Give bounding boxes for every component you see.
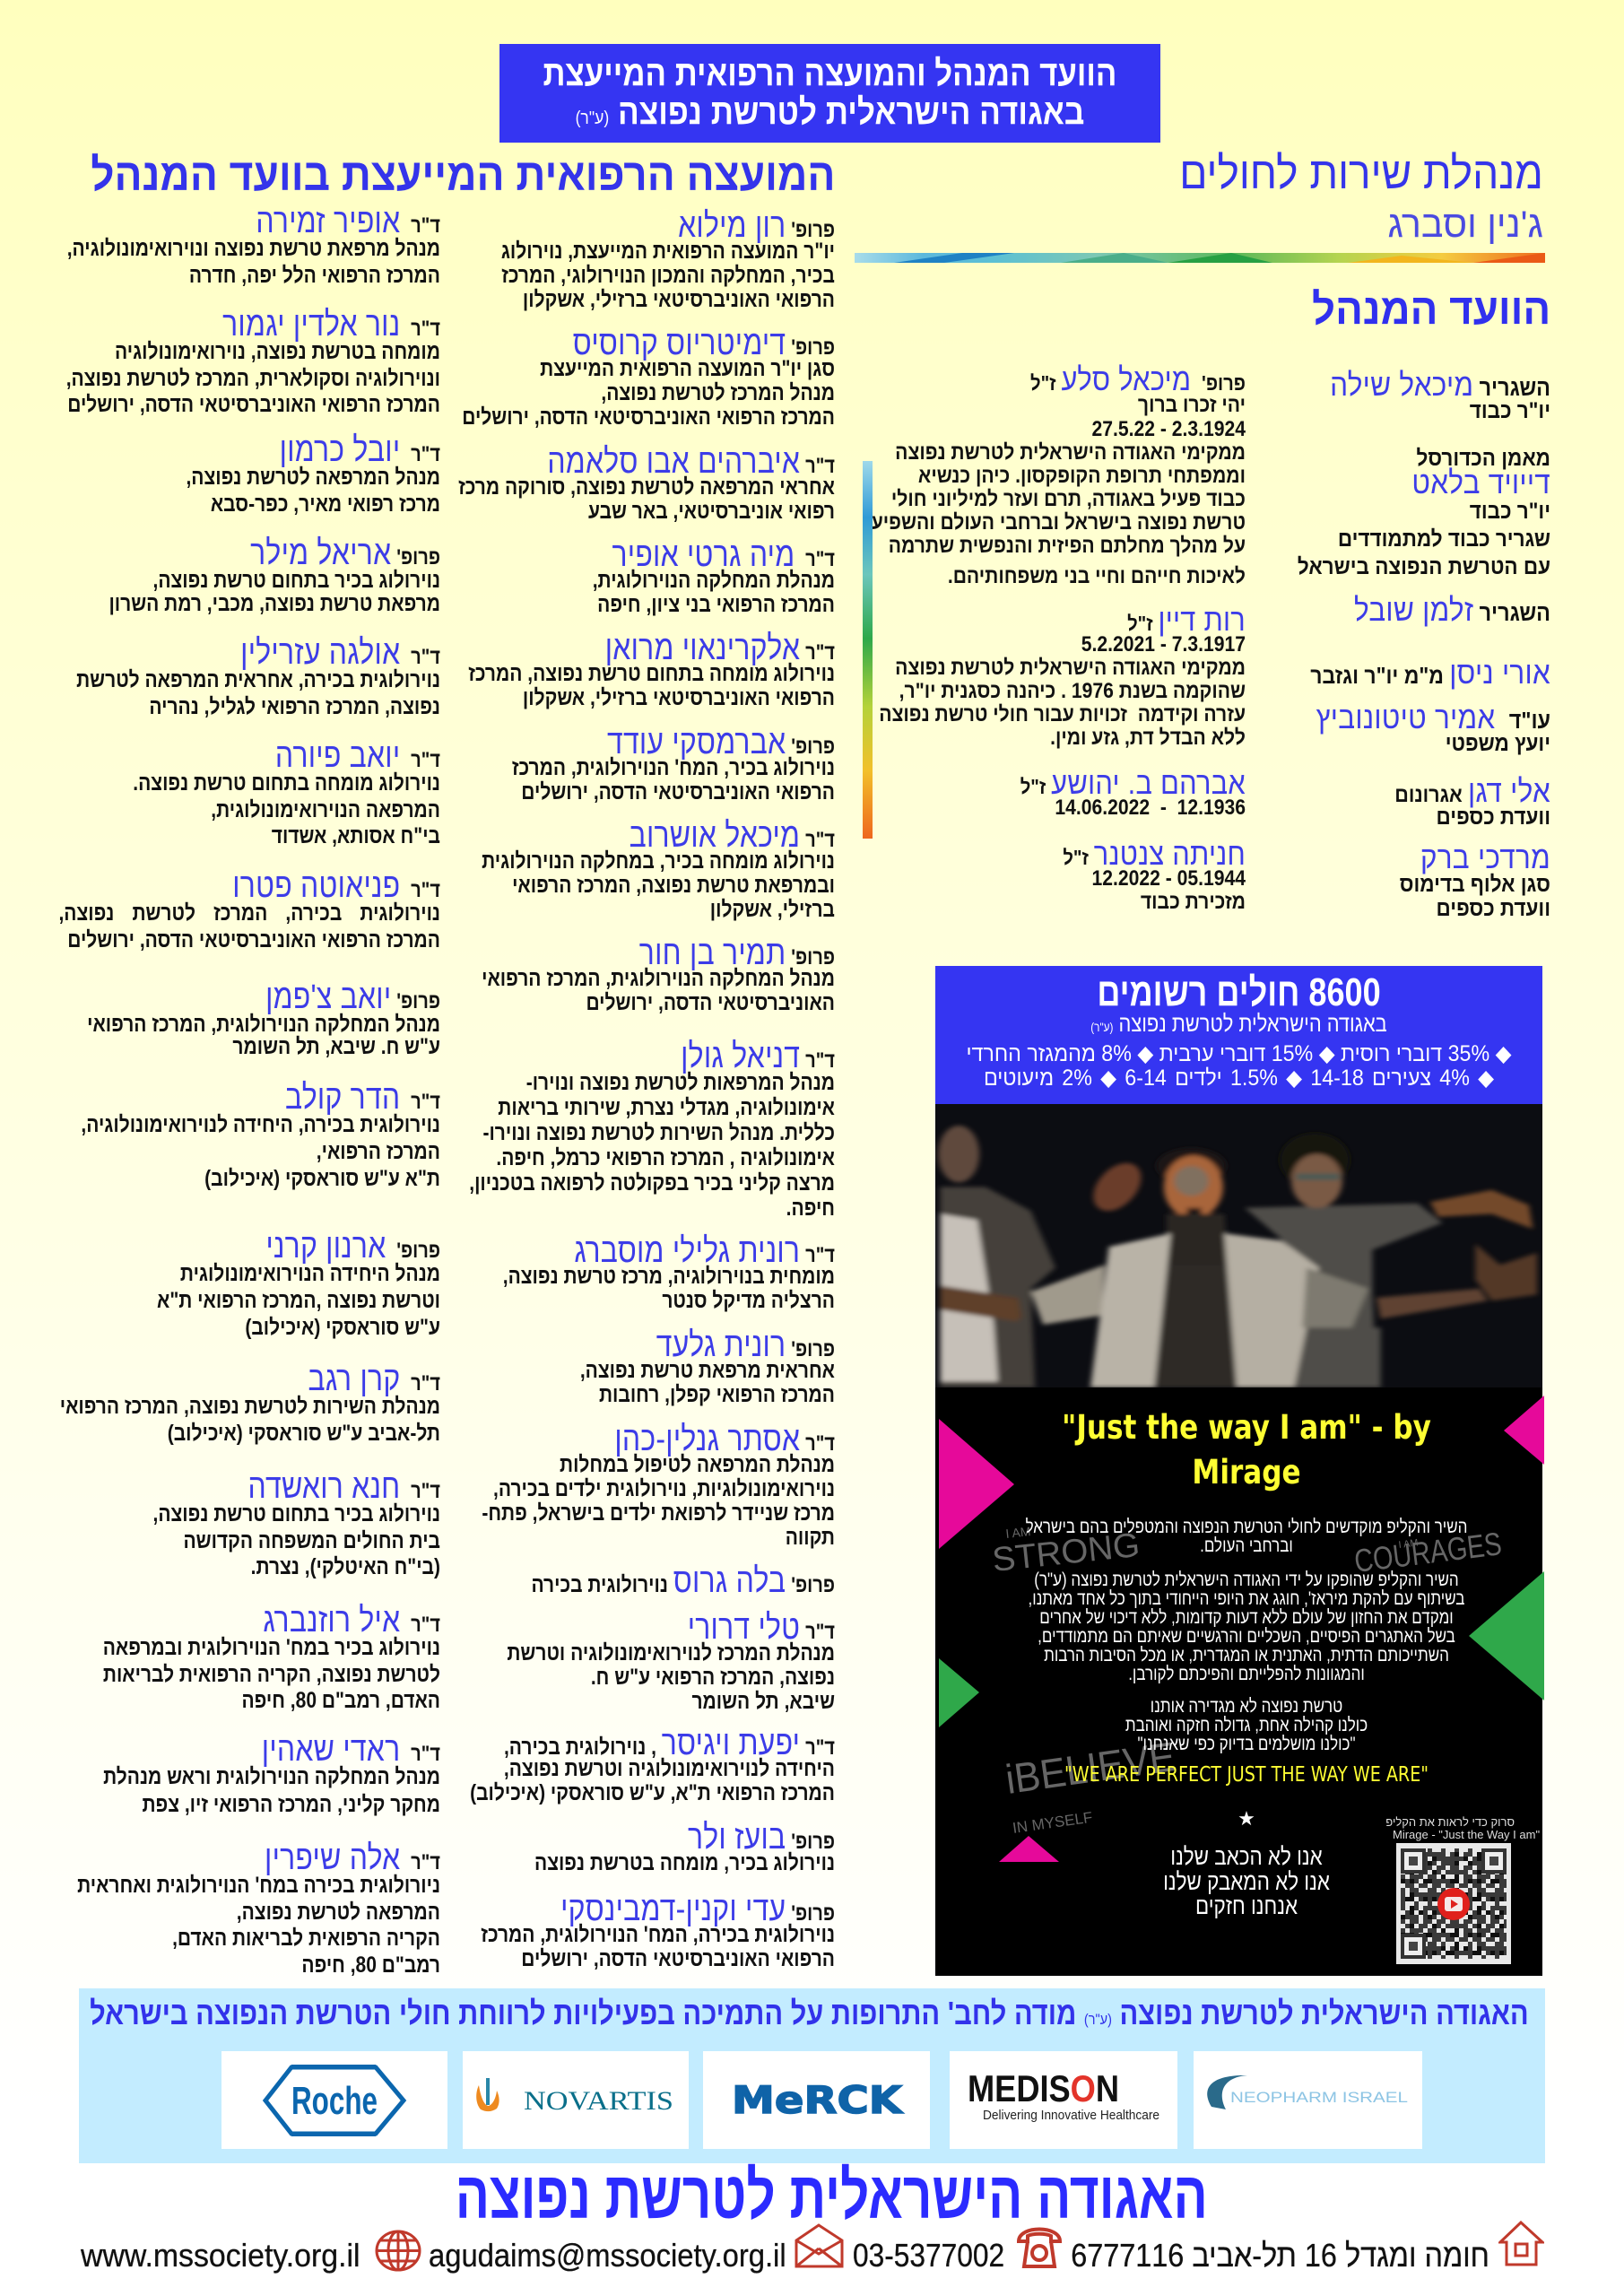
- council: Michael Osherov: ברזילי, אשקלון: [710, 897, 835, 922]
- council: Yifat Vigiser: היחידה לנוירואימונולוגיה וטרשת נפוצה,: [504, 1756, 835, 1781]
- council: Tali Drori: מנהלת המרכז לנוירואימונולוגיה וטרשת: [507, 1640, 835, 1665]
- council: Keren Regev: [64, 1365, 440, 1448]
- closing statement: אנו לא הכאב שלנו: [1170, 1843, 1323, 1870]
- memorial: Ruth Dayan: שהוקמה בשנת 1976 . כיהנה כסגנית יו"ר,: [899, 679, 1246, 703]
- logo: Roche: [221, 2051, 447, 2149]
- council: Tali Drori: ד"ר טלי דרורי: [688, 1609, 835, 1647]
- council: Eyal Rosenberg: [64, 1606, 440, 1715]
- council: Ella Shifrin: ניורולוגית בכירה במח' הנוירולוגית ואחראית: [77, 1873, 440, 1898]
- board: Mordechai Barak: וועדת כספים: [1437, 896, 1550, 921]
- council: Adi Vaknin-Dembinsky: [481, 1891, 835, 1971]
- council: Adi Vaknin-Dembinsky: הרפואי האוניברסיטאי הדסה, ירושלים: [521, 1946, 835, 1971]
- council: Adi Vaknin-Dembinsky: נוירולוגית בכירה, המח' הנוירולוגית, המרכז: [481, 1922, 835, 1947]
- board: David Blatt: מאמן הכדורסל: [1417, 446, 1550, 471]
- council: Ariel Miller: פרופ' אריאל מילר: [250, 535, 440, 572]
- QR caption: [1393, 1816, 1515, 1841]
- council: Yoav Piura: ד"ר יואב פיורה: [275, 737, 440, 775]
- closing statement: אנו לא המאבק שלנו: [1163, 1867, 1330, 1894]
- council: Hana Rawashdeh: (בי"ח האיטלקי), נצרת.: [251, 1554, 440, 1579]
- memorial: A.B. Yehoshua: אברהם ב. יהושע ז"ל: [1020, 766, 1246, 801]
- council: Esther Ganelin-Cohen: ד"ר אסתר גנלין-כהן: [614, 1421, 835, 1458]
- council: Eyal Rosenberg: ד"ר איל רוזנברג: [263, 1602, 440, 1639]
- photo: band Mirage performing: [935, 1104, 1542, 1388]
- panel: registered patients stats: [935, 966, 1542, 1104]
- song text paragraph 3: "כולנו מושלמים בדיוק כפי שאנחנו": [1137, 1734, 1356, 1754]
- council: Esther Ganelin-Cohen: תקווה: [786, 1525, 835, 1550]
- sponsors heading: האגודה הישראלית לטרשת נפוצה (ע"ר) מודה לחב' התרופות על התמיכה בפעילויות לרווחת חולי הטרשת הנפוצה בישראל: [90, 1995, 1529, 2031]
- council: Radi Shahien: מנהל המחלקה הנוירולוגית וראש מנהלת: [103, 1764, 440, 1789]
- council: Abramsky Oded: [512, 724, 835, 804]
- council: Ibrahim Abu Salameh: ד"ר איברהים אבו סלאמה: [547, 443, 835, 481]
- council: Maya Gerty Ofir: [593, 536, 835, 617]
- council: Maya Gerty Ofir: מנהלת המחלקה הנוירולוגית,: [593, 568, 835, 593]
- song title: "Just the way I am" - by: [1062, 1408, 1431, 1447]
- memorial: Michael Sela: כבוד פעיל באגודה, תרם ועזר למיליוני חולי: [891, 487, 1246, 511]
- board: David Blatt: שגריר כבוד למתמודדים: [1338, 526, 1550, 552]
- board: Mordechai Barak: [1400, 840, 1550, 921]
- song text paragraph 3: טרשת נפוצה לא מגדירה אותנו: [1151, 1696, 1342, 1717]
- memorial: Michael Sela: [872, 362, 1246, 588]
- contact: address: חומה ומגדל 16 תל-אביב 6777116: [1071, 2237, 1489, 2274]
- council: Keren Regev: מנהלת השירות לטרשת נפוצה, המרכז הרפואי: [60, 1394, 440, 1419]
- council: Hadar Kolb: נוירולוגית בכירה, היחידה לנוירואימונולוגיה,: [81, 1112, 440, 1137]
- decorative triangles: iBELIEVE: [1003, 1733, 1178, 1803]
- council: Ofir Zmira: המרכז הרפואי הלל יפה, חדרה: [189, 262, 440, 287]
- board: David Blatt: דייויד בלאט: [1411, 465, 1550, 500]
- council: Ella Shifrin: רמב"ם 80, חיפה: [301, 1952, 440, 1977]
- memorial: Hanita Tzenter: חניתה צנטנר ז"ל: [1063, 837, 1246, 872]
- stat headline: 8600 חולים רשומים: [1097, 970, 1381, 1014]
- council: Ron Milo: [501, 207, 835, 312]
- star: ★: [1238, 1807, 1255, 1830]
- yellow slogan: "WE ARE PERFECT JUST THE WAY WE ARE": [1064, 1763, 1429, 1787]
- heading: medical advisory council: המועצה הרפואית המייעצת בוועד המנהל: [91, 150, 835, 200]
- council: Ronit Galili Mosberg: ד"ר רונית גלילי מוסברג: [574, 1232, 835, 1270]
- logo: Medison: [950, 2051, 1177, 2149]
- council: Ronit Gilad: המרכז הרפואי קפלן, רחובות: [599, 1382, 835, 1407]
- song text paragraph 3: [935, 1697, 1558, 1753]
- song text paragraph 2: ומקדם את החזון של עולם ללא דעות קדומות, ללא דיכוי של אחרים: [1039, 1607, 1454, 1628]
- council: Daniel Golan: ד"ר דניאל גולן: [681, 1038, 835, 1075]
- council: Esther Ganelin-Cohen: מרכז שניידר לרפואת ילדים בישראל, פתח-: [482, 1500, 835, 1526]
- board: Michael Shilo: [1330, 368, 1550, 423]
- council: Ella Shifrin: המרפאה לטרשת נפוצה,: [237, 1900, 440, 1925]
- council: Boaz Weller: [534, 1819, 835, 1875]
- council: Keren Regev: ד"ר קרן רגב: [308, 1361, 440, 1398]
- song text paragraph 1: וברחבי העולם.: [1200, 1535, 1293, 1556]
- council: Arnon Karni: [64, 1232, 440, 1342]
- council: Tali Drori: נפוצה, המרכז הרפואי ע"ש ח.: [591, 1665, 835, 1690]
- rainbow bar horizontal: [855, 253, 1545, 263]
- board: Amir Titunovitch: [1316, 700, 1550, 756]
- title line 2: באגודה הישראלית לטרשת נפוצה (ע"ר): [576, 92, 1084, 132]
- council: Yuval Karmon: ד"ר יובל כרמון: [280, 431, 440, 469]
- heading: patient services manager: מנהלת שירות לחולים: [1179, 148, 1543, 198]
- song title: Mirage: [1192, 1453, 1301, 1492]
- contact: phone: 03-5377002: [853, 2237, 1004, 2274]
- logo: Roche: Roche: [291, 2079, 378, 2123]
- logo: Neopharm Israel: NEOPHARM ISRAEL: [1230, 2089, 1408, 2106]
- council: Ella Shifrin: ד"ר אלה שיפרין: [265, 1839, 440, 1877]
- council: Radi Shahien: [64, 1735, 440, 1819]
- council: Yuval Karmon: [186, 431, 440, 517]
- council: Eyal Rosenberg: נוירולוג בכיר במח' הנוירולוגית ובמרפאה: [103, 1635, 440, 1660]
- council: Olga Azarilin: [64, 639, 440, 720]
- council: Yuval Karmon: מרכז רפואי מאיר, כפר-סבא: [211, 491, 440, 517]
- board: Zalman Shoval: השגריר זלמן שובל: [1354, 593, 1550, 628]
- council: Daniel Golan: אימונולוגיה , המרכז הרפואי כרמל, חיפה.: [496, 1145, 835, 1170]
- council: Yifat Vigiser: [470, 1725, 835, 1805]
- council: Yoav Piura: נוירולוג מומחה בתחום טרשת נפוצה.: [133, 770, 440, 796]
- council: Tali Drori: [507, 1609, 835, 1714]
- logo: Merck: [703, 2051, 930, 2149]
- council: Yoav Chapman: ע"ש ח. שיבא, תל השומר: [232, 1034, 440, 1059]
- panel: sponsors thanks: [79, 1988, 1545, 2163]
- council: Abramsky Oded: הרפואי האוניברסיטאי הדסה, ירושלים: [521, 779, 835, 804]
- council column right: [458, 207, 835, 1971]
- memorial: Michael Sela: פרופ' מיכאל סלע ז"ל: [1030, 362, 1246, 397]
- council: Ronit Gilad: אחראית מרפאת טרשת נפוצה,: [580, 1358, 835, 1383]
- council: Tamir Ben Hur: [482, 935, 835, 1015]
- council: Ibrahim Abu Salameh: אחראי המרפאה לטרשת נפוצה, סורוקה מרכז: [458, 474, 835, 500]
- council: Dimitrios Karussis: סגן יו"ר המועצה הרפואית המייעצת: [540, 356, 835, 381]
- heading: board of directors: הוועד המנהל: [1312, 286, 1550, 334]
- memorial: Hanita Tzenter: 05.1944 - 12.2022: [1092, 866, 1246, 891]
- council: Arnon Karni: מנהל היחידה הנוירואימונולוגית: [180, 1261, 440, 1286]
- council: Nour Eldin Yagmour: המרכז הרפואי האוניברסיטאי הדסה, ירושלים: [67, 392, 440, 417]
- council: Ella Shifrin: הקריה הרפואית לבריאות האדם,: [172, 1926, 440, 1951]
- council: Hadar Kolb: המרכז הרפואי,: [317, 1139, 440, 1164]
- song text paragraph 2: [935, 1570, 1558, 1683]
- title banner: [499, 44, 1160, 143]
- board: Mordechai Barak: סגן אלוף בדימוס: [1400, 872, 1550, 897]
- council: Olga Azarilin: ד"ר אולגה עזרילין: [240, 634, 440, 672]
- QR code: [1396, 1843, 1511, 1964]
- footer organisation name: האגודה הישראלית לטרשת נפוצה: [456, 2158, 1208, 2232]
- memorial: Ruth Dayan: [879, 603, 1246, 750]
- stats line 2: ◆ 4% צעירים 14-18 ◆ 1.5% ילדים 6-14 ◆ 2% מיעוטים: [984, 1065, 1494, 1091]
- council: Maya Gerty Ofir: המרכז הרפואי בני ציון, חיפה: [597, 592, 835, 617]
- council: Daniel Golan: מנהל המרפאות לטרשת נפוצה ונוירו-: [526, 1070, 835, 1095]
- board: David Blatt: [1298, 446, 1550, 579]
- council: Ronit Galili Mosberg: מומחית בנוירולוגיה, מרכז טרשת נפוצה,: [503, 1264, 835, 1289]
- council: Dimitrios Karussis: פרופ' דימיטריוס קרוסיס: [573, 325, 835, 362]
- council: Ron Milo: בכיר, המחלקה והמכון הנוירולוגי, המרכז: [501, 263, 835, 288]
- council: Daniel Golan: [469, 1038, 835, 1221]
- council: Ofir Zmira: [67, 203, 440, 287]
- council: Tamir Ben Hur: פרופ' תמיר בן חור: [639, 935, 835, 972]
- board: Michael Shilo: השגריר מיכאל שילה: [1330, 368, 1550, 403]
- council: Elkrinawi Marwan: ד"ר אלקרינאוי מרואן: [605, 630, 835, 667]
- memorial: A.B. Yehoshua: [1020, 766, 1246, 820]
- council: Daniel Golan: מרצה קליני בכיר בפקולטה לרפואה בטכניון,: [469, 1170, 835, 1196]
- council: Ronit Galili Mosberg: [503, 1232, 835, 1313]
- council: Nour Eldin Yagmour: מומחה בטרשת נפוצה, נוירואימונולוגיה: [115, 339, 440, 364]
- council: Yifat Vigiser: ד"ר יפעת ויגיסר , נוירולוגית בכירה,: [504, 1725, 835, 1762]
- council: Michael Osherov: ובמרפאת טרשת נפוצה, המרכז הרפואי: [512, 873, 835, 898]
- memorial: Michael Sela: ממקימי האגודה הישראלית לטרשת נפוצה: [895, 440, 1246, 465]
- memorial: Michael Sela: יהי זכרו ברוך: [1138, 393, 1246, 417]
- council: Panayiota Petrou: נוירולוגית בכירה, המרכז לטרשת נפוצה,: [58, 900, 440, 926]
- logo: Medison: Delivering Innovative Healthcare: [983, 2108, 1159, 2123]
- memorial: Michael Sela: 2.3.1924 - 27.5.22: [1092, 417, 1246, 441]
- memorial: Ruth Dayan: עזרה וקידמה זכויות עבור חולי טרשת נפוצה: [879, 702, 1246, 726]
- logo: Neopharm Israel: [1194, 2051, 1422, 2149]
- rainbow bar vertical: [863, 461, 873, 839]
- council: Yoav Piura: המרפאה הנוירואימונולוגית,: [211, 796, 440, 822]
- council: Maya Gerty Ofir: ד"ר מיה גרטי אופיר: [612, 536, 835, 574]
- council: Panayiota Petrou: [64, 872, 440, 953]
- stat subtitle: באגודה הישראלית לטרשת נפוצה (ע"ר): [1090, 1010, 1387, 1037]
- council: Boaz Weller: פרופ' בועז ולר: [688, 1819, 835, 1857]
- icon: house: [1498, 2221, 1544, 2266]
- stats line 1: ◆ 35% דוברי רוסית ◆ 15% דוברי ערבית ◆ 8% מהמגזר החרדי: [967, 1041, 1511, 1066]
- icon: telephone: [1015, 2227, 1064, 2268]
- board: Eli Dagan: וועדת כספים: [1437, 804, 1550, 830]
- council: Ronit Gilad: [580, 1326, 835, 1407]
- contact: email: agudaims@mssociety.org.il: [429, 2237, 786, 2274]
- memorial: Michael Sela: לאיכות חייהם וחיי בני משפחותיהם.: [948, 564, 1246, 588]
- decorative triangles: STRONG: [991, 1526, 1142, 1579]
- council: Michael Osherov: [482, 817, 835, 922]
- council: Daniel Golan: חיפה.: [786, 1196, 835, 1221]
- council: Olga Azarilin: נפוצה, המרכז הרפואי לגליל, נהריה: [149, 694, 440, 719]
- memorial: Ruth Dayan: ממקימי האגודה הישראלית לטרשת נפוצה: [895, 656, 1246, 680]
- memorial: Michael Sela: על מהלך מחלתם הפיזית והנפשית שתרמה: [889, 534, 1246, 558]
- board: David Blatt: עם הטרשת הנפוצה בישראל: [1298, 554, 1550, 579]
- council: Panayiota Petrou: ד"ר פניאוטה פטרו: [232, 867, 440, 905]
- council: Ronit Galili Mosberg: הרצליה מדיקל סנטר: [662, 1288, 835, 1313]
- council: Esther Ganelin-Cohen: [482, 1421, 835, 1550]
- memorial: Ruth Dayan: רות דיין ז"ל: [1127, 603, 1246, 638]
- council: Hana Rawashdeh: [64, 1473, 440, 1580]
- council: Arnon Karni: ע"ש סוראסקי (איכילוב): [245, 1315, 440, 1340]
- council: Tali Drori: שיבא, תל השומר: [691, 1689, 835, 1714]
- council: Abramsky Oded: נוירולוג בכיר, המח' הנוירולוגית, המרכז: [512, 755, 835, 780]
- council: Olga Azarilin: נוירולוגית בכירה, אחראית המרפאה לטרשת: [76, 667, 440, 692]
- council: Esther Ganelin-Cohen: מנהלת המרפאה לטיפול במחלות: [560, 1452, 835, 1477]
- decorative triangles: I AM: [1398, 1537, 1419, 1551]
- council: Esther Ganelin-Cohen: נוירואימונולוגיות, נוירולוגית ילדים בכירה,: [493, 1476, 835, 1501]
- song text paragraph 2: בשל האתגרים הפיסיים, השכליים והרגשיים שאיתם הם מתמודדים,: [1038, 1626, 1455, 1647]
- council: Eyal Rosenberg: לטרשת נפוצה, הקריה הרפואית לבריאות: [103, 1661, 440, 1686]
- board: Eli Dagan: אלי דגן אגרונום: [1394, 774, 1550, 809]
- council: Hana Rawashdeh: ד"ר חנא רואשדה: [248, 1468, 440, 1506]
- council: Boaz Weller: נוירולוג בכיר, מומחה בטרשת נפוצה: [534, 1850, 835, 1875]
- contact: website: www.mssociety.org.il: [81, 2237, 360, 2274]
- council: Elkrinawi Marwan: [468, 630, 835, 710]
- council column left: [58, 203, 440, 1977]
- council: Hadar Kolb: ת"א ע"ש סוראסקי (איכילוב): [204, 1166, 440, 1191]
- council: Dimitrios Karussis: המרכז הרפואי האוניברסיטאי הדסה, ירושלים: [462, 404, 835, 430]
- song text paragraph 3: כולנו קהילה אחת, גדולה חזקה ואוהבת: [1125, 1715, 1368, 1735]
- memorial: Michael Sela: טרשת נפוצה בישראל וברחבי העולם והשפיע: [872, 510, 1246, 535]
- icon: globe: [375, 2230, 421, 2272]
- closing statement: [988, 1845, 1505, 1919]
- council: Dimitrios Karussis: מנהל המרכז לטרשת נפוצה,: [601, 380, 835, 405]
- council: Nour Eldin Yagmour: ד"ר נור אלדין יגמור: [222, 306, 440, 344]
- council: Yoav Chapman: מנהל המחלקה הנוירולוגית, המרכז הרפואי: [87, 1012, 440, 1037]
- council: Ronit Gilad: פרופ' רונית גלעד: [656, 1326, 835, 1364]
- council: Ibrahim Abu Salameh: [458, 443, 835, 524]
- memorial: Michael Sela: וממפתחי תרופת הקופקסון. כיהן כנשיא: [918, 464, 1246, 488]
- council: Ariel Miller: נוירולוג בכיר בתחום טרשת נפוצה,: [152, 568, 440, 593]
- board: Uri Nisan: אורי ניסן מ"מ יו"ר וגזבר: [1310, 656, 1550, 691]
- council: Hadar Kolb: ד"ר הדר קולב: [285, 1079, 440, 1117]
- council: Abramsky Oded: פרופ' אברמסקי עודד: [607, 724, 835, 761]
- council: Daniel Golan: אימונולוגיה, מגדלי נצרת, שירותי בריאות: [498, 1095, 835, 1120]
- council: Nour Eldin Yagmour: ונוירולוגיה וסקולארית, המרכז לטרשת נפוצה,: [66, 366, 440, 391]
- QR caption: סרוק כדי לראות את הקליפ: [1385, 1815, 1515, 1829]
- name: patient services manager: ג'נין וסברג: [1388, 203, 1543, 245]
- song text paragraph 2: השתייכותם הדתית, האתנית או המגדרית, או מכל הסיבות הרבות: [1044, 1645, 1449, 1665]
- council: Nour Eldin Yagmour: [66, 306, 440, 417]
- title line 1: הוועד המנהל והמועצה הרפואית המייעצת: [543, 54, 1116, 93]
- council: Panayiota Petrou: המרכז הרפואי האוניברסיטאי הדסה, ירושלים: [67, 927, 440, 952]
- council: Yuval Karmon: מנהל המרפאה לטרשת נפוצה,: [186, 465, 440, 490]
- logo: Novartis: [463, 2051, 689, 2149]
- council: Ron Milo: פרופ' רון מילוא: [678, 207, 835, 245]
- decorative triangles: IN MYSELF: [1012, 1809, 1093, 1837]
- memorial: Hanita Tzenter: מזכירת כבוד: [1141, 890, 1246, 914]
- council: Ron Milo: יו"ר המועצה הרפואית המייעצת, נוירולוג: [501, 239, 835, 264]
- council: Dimitrios Karussis: [462, 325, 835, 430]
- board: Michael Shilo: יו"ר כבוד: [1470, 398, 1550, 423]
- council: Ron Milo: הרפואי האוניברסיטאי ברזילי, אשקלון: [523, 287, 835, 312]
- memorial: Ruth Dayan: 7.3.1917 - 5.2.2021: [1081, 632, 1246, 657]
- panel: song Just the way I am: [935, 1387, 1542, 1976]
- council: Keren Regev: תל-אביב ע"ש סוראסקי (איכילוב): [168, 1421, 440, 1446]
- council: Yoav Chapman: [64, 983, 440, 1060]
- closing statement: אנחנו חזקים: [1195, 1892, 1298, 1919]
- council: Ella Shifrin: [64, 1844, 440, 1979]
- council: Ofir Zmira: ד"ר אופיר זמירה: [256, 203, 440, 240]
- logo: Merck: MeRCK: [732, 2078, 904, 2122]
- council: Eyal Rosenberg: האדם, רמב"ם 80, חיפה: [241, 1688, 440, 1713]
- council: Hana Rawashdeh: נוירולוג בכיר בתחום טרשת נפוצה,: [152, 1501, 440, 1526]
- board: Amir Titunovitch: יועץ משפטי: [1446, 731, 1550, 756]
- board: Amir Titunovitch: עו"ד אמיר טיטונוביץ: [1316, 700, 1550, 735]
- council: Yoav Piura: בי"ח אסותא, אשדוד: [272, 823, 440, 848]
- icon: envelope: [795, 2223, 844, 2268]
- council: Elkrinawi Marwan: הרפואי האוניברסיטאי ברזילי, אשקלון: [523, 685, 835, 710]
- council: Ofir Zmira: מנהל מרפאת טרשת נפוצה ונוירואימונולוגיה,: [67, 236, 440, 261]
- council: Tamir Ben Hur: האוניברסיטאי הדסה, ירושלים: [586, 990, 835, 1015]
- council: Arnon Karni: פרופ' ארנון קרני: [265, 1228, 440, 1265]
- song text paragraph 1: השיר והקליפ מוקדשים לחולי הטרשת הנפוצה והמטפלים בהם בישראל: [1026, 1517, 1467, 1537]
- council: Yifat Vigiser: המרכז הרפואי ת"א, ע"ש סוראסקי (איכילוב): [470, 1780, 835, 1805]
- song text paragraph 2: בשיתוף עם להקת מיראז', חוגג את היופי הייחודי בתוך כל אחד מאתנו,: [1029, 1588, 1464, 1609]
- council: Yoav Piura: [64, 742, 440, 850]
- QR caption: Mirage - "Just the Way I am": [1393, 1828, 1540, 1841]
- memorial: Ruth Dayan: ללא הבדל דת, גזע ומין.: [1050, 726, 1246, 750]
- council: Ibrahim Abu Salameh: רפואי אוניברסיטאי, באר שבע: [588, 499, 835, 524]
- council: Arnon Karni: וטרשת נפוצה ,המרכז הרפואי ת"א: [157, 1288, 440, 1313]
- council: Ariel Miller: מרפאת טרשת נפוצה, מכבי, רמת השרון: [109, 591, 440, 616]
- council: Hana Rawashdeh: בית החולים המשפחה הקדושה: [183, 1528, 440, 1553]
- council: Adi Vaknin-Dembinsky: פרופ' עדי וקנין-דמבינסקי: [560, 1891, 835, 1928]
- council: Bella Gross: פרופ' בלה גרוס נוירולוגית בכירה: [531, 1562, 835, 1600]
- council: Daniel Golan: כללית. מנהל השירות לטרשת נפוצה ונוירו-: [482, 1120, 835, 1145]
- decorative triangles: [935, 1387, 1542, 1976]
- council: Hadar Kolb: [64, 1083, 440, 1193]
- decorative triangles: COURAGES: [1352, 1525, 1504, 1579]
- council: Yoav Chapman: פרופ' יואב צ'פמן: [265, 978, 440, 1016]
- council: Tamir Ben Hur: מנהל המחלקה הנוירולוגית, המרכז הרפואי: [482, 966, 835, 991]
- board: Eli Dagan: [1394, 774, 1550, 830]
- song text paragraph 2: והמגוונות להפלייתם והפיכתם לקורבן.: [1128, 1664, 1365, 1684]
- council: Ariel Miller: [64, 539, 440, 617]
- memorial: A.B. Yehoshua: 12.1936 - 14.06.2022: [1055, 796, 1246, 820]
- song title: [986, 1405, 1507, 1495]
- council: Elkrinawi Marwan: נוירולוג מומחה בתחום טרשת נפוצה, המרכז: [468, 661, 835, 686]
- council: Michael Osherov: נוירולוג מומחה בכיר, במחלקה הנוירולוגית: [482, 848, 835, 874]
- board: David Blatt: יו"ר כבוד: [1470, 499, 1550, 524]
- council: Michael Osherov: ד"ר מיכאל אושרוב: [630, 817, 835, 855]
- memorial: Hanita Tzenter: [1063, 837, 1246, 914]
- logo: Novartis: NOVARTIS: [524, 2086, 673, 2116]
- song text paragraph 2: השיר והקליפ שהופקו על ידי האגודה הישראלית לטרשת נפוצה (ע"ר): [1034, 1570, 1459, 1590]
- song text paragraph 1: [935, 1518, 1558, 1555]
- council: Radi Shahien: ד"ר ראדי שאהין: [262, 1731, 440, 1769]
- council: Radi Shahien: מחקר קליני, המרכז הרפואי זיו, צפת: [142, 1792, 440, 1817]
- board: Mordechai Barak: מרדכי ברק: [1420, 840, 1550, 875]
- logo: Medison: MEDISON: [968, 2067, 1119, 2109]
- decorative triangles: I AM: [1005, 1524, 1031, 1541]
